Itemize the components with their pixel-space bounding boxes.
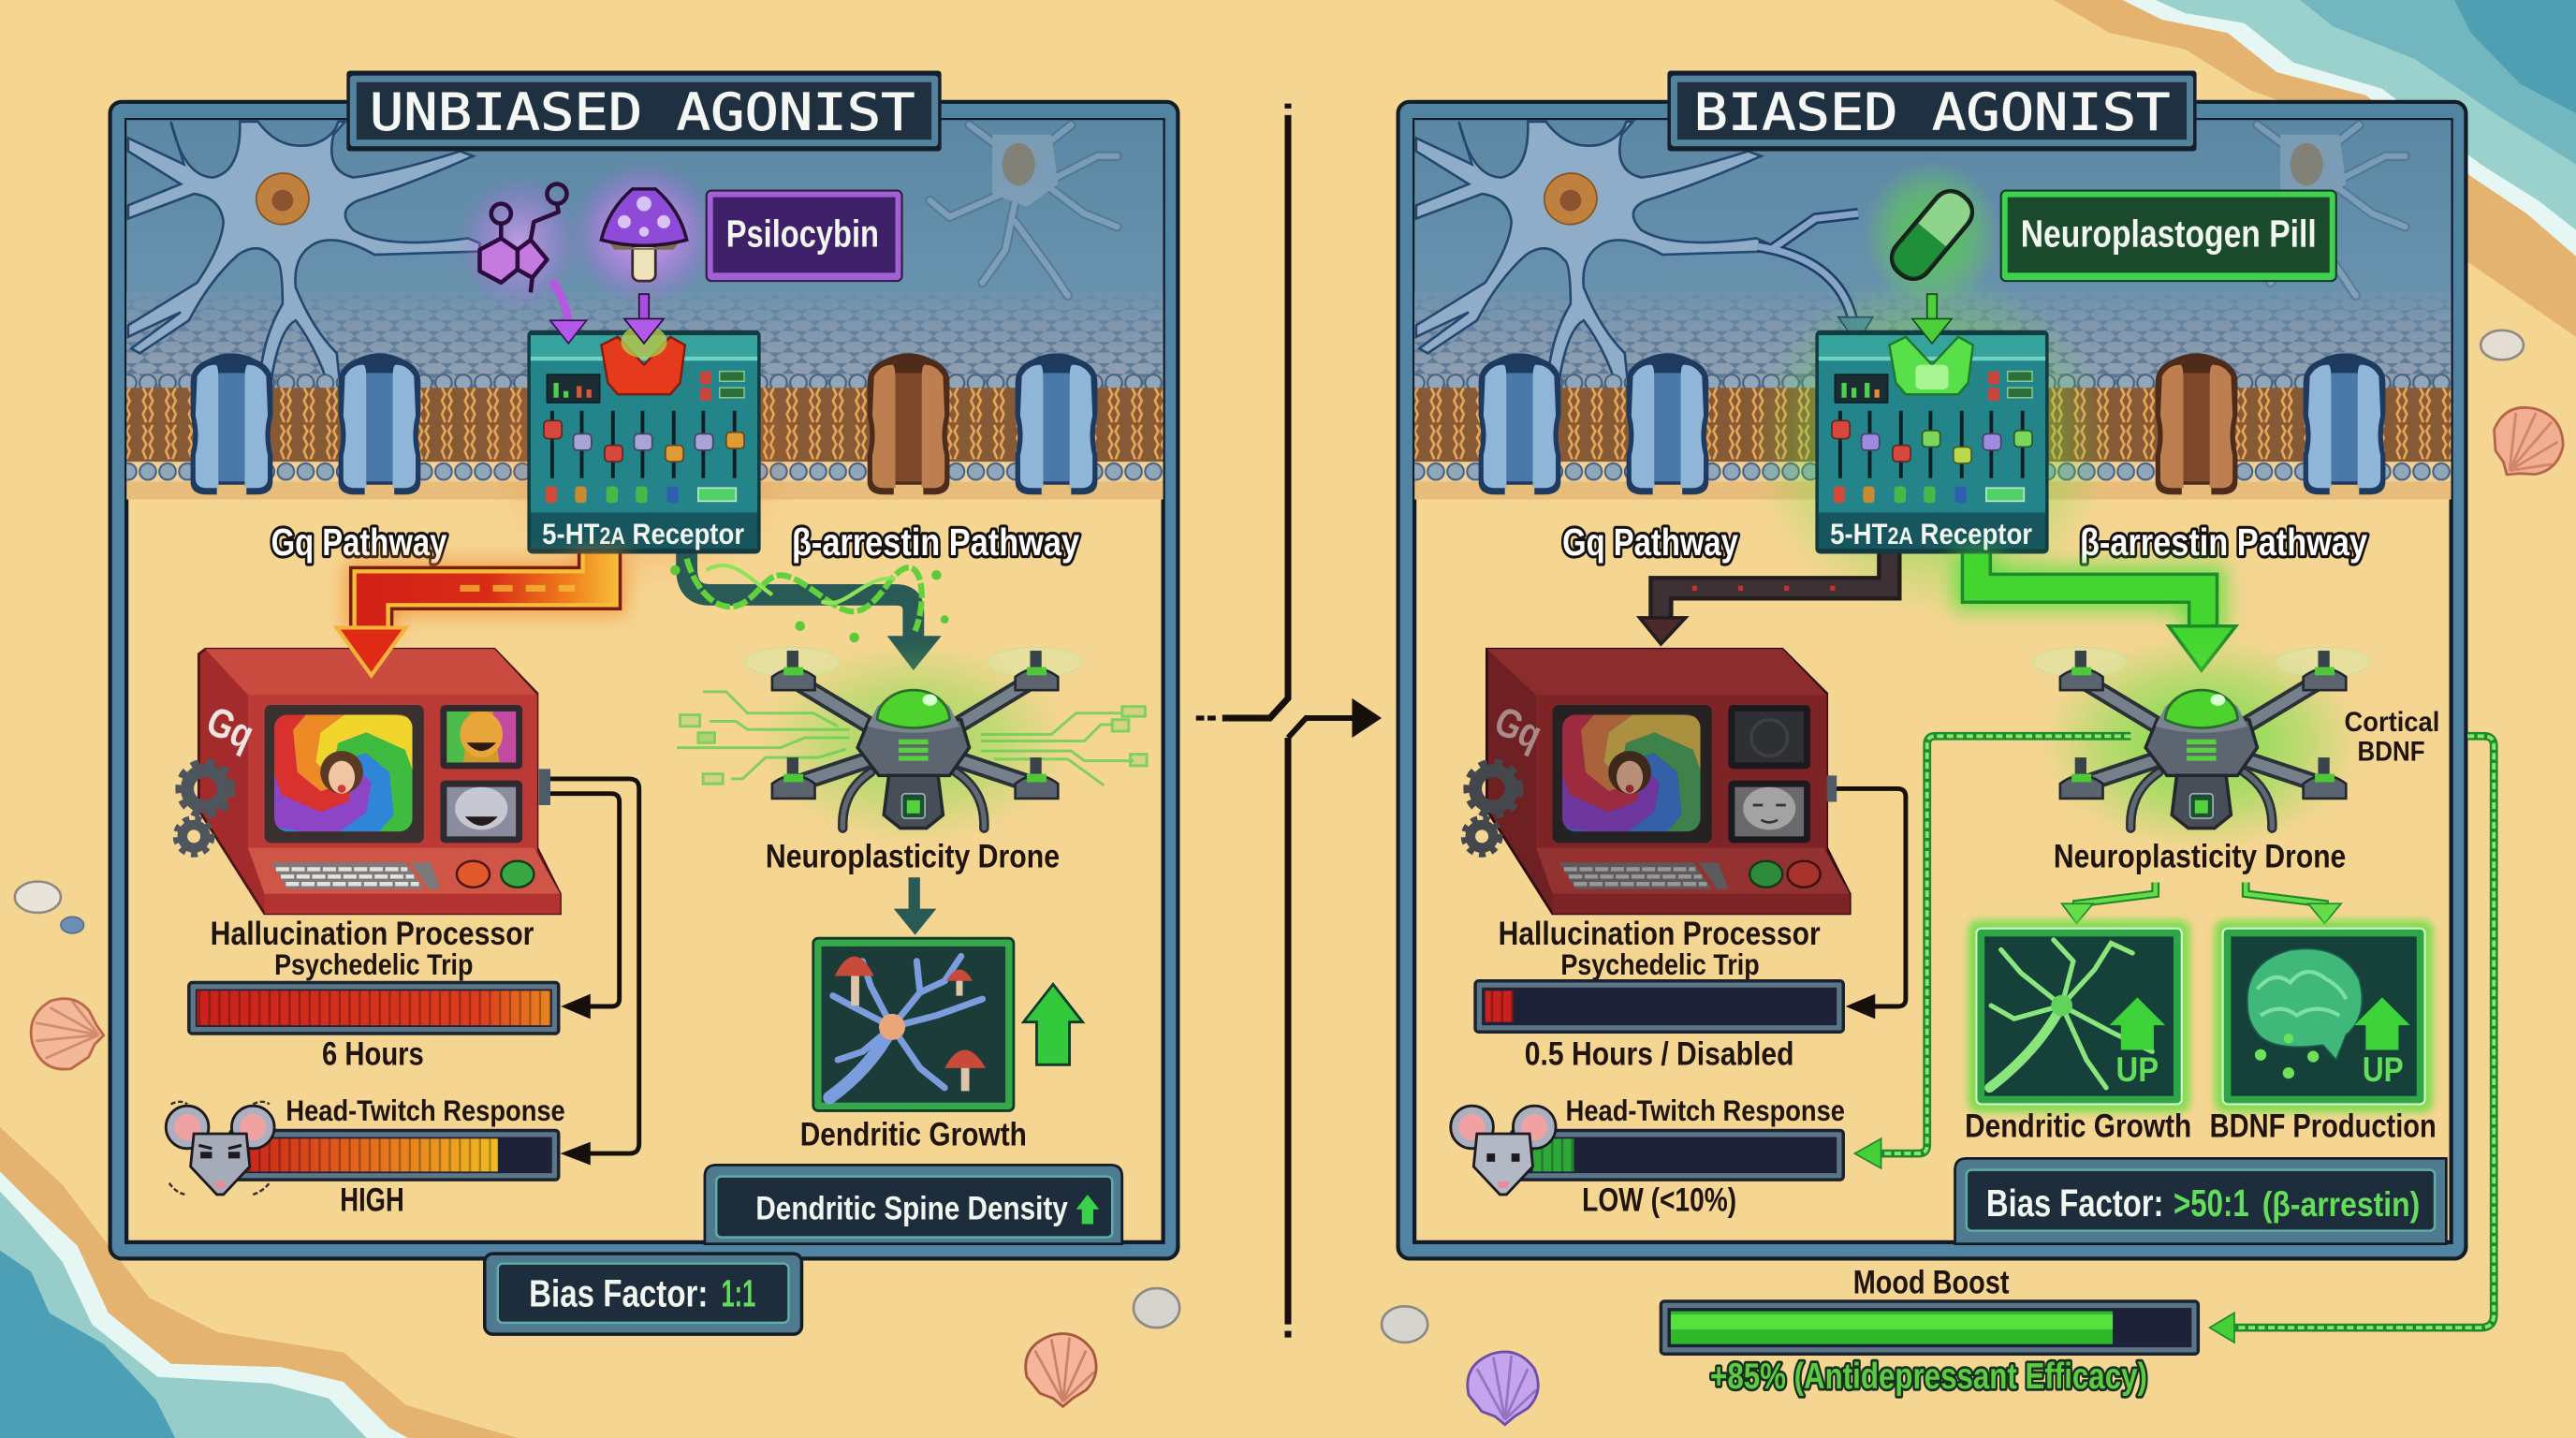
label: hallucination processor: Hallucination Processor: [1499, 916, 1821, 952]
side Gq mark: Gq: [1488, 697, 1548, 758]
label: dendritic growth: Dendritic Growth: [1965, 1108, 2191, 1145]
cell membrane scene: [126, 120, 1164, 500]
heading: unbiased agonist title: UNBIASED AGONIST: [370, 83, 915, 142]
drone glow: [757, 640, 1070, 844]
label: half hour disabled: 0.5 Hours / Disabled: [1525, 1035, 1794, 1072]
label: psychedelic trip: Psychedelic Trip: [274, 947, 473, 981]
icon: hallucination processor computer: [176, 649, 560, 914]
label: BDNF production: BDNF Production: [2210, 1108, 2437, 1145]
gears: [1464, 762, 1519, 855]
main screen dim spiral: [1552, 705, 1712, 843]
arrow: drone to BDNF: [2246, 882, 2341, 923]
label: low: LOW (<10%): [1582, 1182, 1736, 1219]
bar: mood boost: [1661, 1301, 2198, 1354]
label: head-twitch response: Head-Twitch Response: [1566, 1093, 1845, 1127]
heading: biased agonist title: BIASED AGONIST: [1694, 83, 2170, 142]
shell: purple: [1468, 1352, 1538, 1425]
shell: coral bottom: [1026, 1334, 1096, 1406]
arrow: dashed green to mood boost: [2210, 736, 2494, 1343]
callout: bias factor 1:1: Bias Factor:: [529, 1271, 708, 1314]
label: neuroplasticity drone: Neuroplasticity Drone: [2054, 839, 2346, 875]
arrow: drone to dendritic growth: [2062, 882, 2156, 923]
icon: calm mouse: [1451, 1106, 1556, 1195]
icon: BDNF production card: UP: [2363, 1050, 2404, 1089]
heading: beta-arrestin pathway: β-arrestin Pathway: [792, 521, 1080, 564]
arrow: dashed green to head-twitch bar: [1855, 736, 2130, 1168]
receptor label: 5-HT2A Receptor: [542, 517, 744, 550]
icon: BDNF production card: [2215, 920, 2433, 1112]
arrow: Gq fire path: [337, 553, 600, 675]
pebble: grey bottom: [1134, 1288, 1179, 1328]
label: dendritic growth: Dendritic Growth: [800, 1116, 1027, 1152]
label: neuroplastogen pill: Neuroplastogen Pill: [2021, 212, 2317, 255]
buttons: [457, 861, 534, 888]
label: six hours: 6 Hours: [322, 1035, 424, 1072]
icon: twitching mouse: [166, 1102, 274, 1195]
arrow: green up: [1023, 984, 1083, 1064]
arrow: pill to receptor: [1912, 294, 1952, 344]
receptor console: [1815, 330, 2049, 553]
receptor label: 5-HT2A Receptor: [1830, 517, 2032, 550]
arrow: beta-arrestin vine path: [670, 553, 949, 670]
fader knobs: [1832, 420, 2032, 463]
small screen: dark: [1728, 705, 1810, 769]
icon: hallucination processor computer (dimmed): [1464, 649, 1850, 914]
label: psychedelic trip: Psychedelic Trip: [1560, 947, 1760, 981]
arrow: molecule to receptor: [550, 281, 587, 344]
pebble: right: [2481, 330, 2524, 360]
ion channels: [191, 353, 1097, 494]
side Gq mark: Gq: [200, 697, 260, 758]
keyboard: [271, 862, 440, 889]
label: neuroplasticity drone: Neuroplasticity Drone: [766, 839, 1060, 875]
bar: trip duration: [189, 983, 559, 1034]
panel sand interior: [1414, 120, 2452, 1242]
icon: neuroplasticity drone: [744, 648, 1083, 829]
small screen: smiling face: [440, 705, 522, 769]
wire: computer to trip bar: [1827, 775, 1906, 1016]
gears: [176, 762, 231, 855]
fader knobs: [544, 420, 744, 462]
label: psilocybin: [707, 191, 902, 281]
pebble: blue: [61, 917, 84, 933]
label: psilocybin: Psilocybin: [726, 212, 879, 255]
panel sand interior: [126, 120, 1164, 1242]
label: high: HIGH: [340, 1182, 404, 1219]
callout: bias factor >50:1: Bias Factor:: [1986, 1181, 2163, 1225]
label: antidepressant efficacy: +85% (Antidepressant Efficacy): [1710, 1357, 2147, 1397]
icon: mushroom: [568, 161, 720, 305]
wires: computer to bars: [539, 769, 639, 1162]
shell: white pebble left: [15, 882, 61, 913]
heading: unbiased agonist title: [346, 70, 942, 151]
green binding socket: [1889, 337, 1973, 394]
callout: bias factor 1:1: [485, 1254, 801, 1334]
label: hallucination processor: Hallucination Processor: [211, 916, 534, 952]
brain: [2247, 948, 2362, 1060]
display bars: [553, 383, 592, 398]
callout: bias factor >50:1: [1955, 1158, 2446, 1244]
mushrooms on spines: [835, 956, 986, 1091]
red binding socket: [601, 326, 685, 394]
panel frame: [1398, 102, 2466, 1258]
main screen spiral: [264, 705, 424, 843]
cell membrane scene: [1414, 120, 2452, 500]
bar: head-twitch response: [1512, 1131, 1843, 1180]
heading: biased agonist title: [1667, 70, 2197, 151]
drone glow: [2041, 634, 2363, 851]
panel frame: [110, 102, 1178, 1258]
shell: coral right: [2476, 393, 2576, 493]
small screen: grey sleeping face: [1728, 781, 1810, 843]
buttons: [1749, 861, 1821, 888]
bar: head-twitch response: [230, 1131, 559, 1180]
ion channels: [1479, 353, 2385, 494]
heading: Gq pathway: Gq Pathway: [271, 521, 447, 564]
arrow: strong beta-arrestin path: [1976, 553, 2236, 670]
label: cortical BDNF: [2345, 707, 2439, 768]
callout: dendritic spine density: Dendritic Spine Density: [755, 1190, 1068, 1226]
heading: beta-arrestin pathway: β-arrestin Pathway: [2080, 521, 2368, 564]
orange receptor glow: [488, 329, 800, 592]
icon: neuroplasticity drone: [2032, 648, 2371, 829]
shell: coral left: [28, 996, 107, 1073]
small screen: glitch face: [440, 781, 522, 843]
ocean: top-right corner: [2054, 0, 2576, 337]
label: head-twitch response: Head-Twitch Response: [285, 1093, 565, 1127]
panel: unbiased agonist: [110, 102, 1178, 1258]
receptor console: [527, 326, 761, 553]
icon: dendritic growth card: [813, 938, 1014, 1110]
ocean: bottom-left corner: [0, 1127, 522, 1438]
callout: bias factor >50:1: (β-arrestin): [2262, 1185, 2420, 1224]
label: neuroplastogen pill: [2001, 191, 2336, 281]
bar: trip duration: [1475, 981, 1843, 1032]
label: cortical BDNF: BDNF: [2358, 737, 2425, 768]
label: mood boost: Mood Boost: [1853, 1264, 2010, 1300]
arrow: drone to dendritic growth: [894, 877, 936, 935]
circuit data lines: [677, 692, 1147, 785]
pebble: grey centre: [1382, 1306, 1427, 1343]
heading: Gq pathway: Gq Pathway: [1562, 521, 1738, 564]
callout: bias factor 1:1: 1:1: [721, 1271, 755, 1314]
display bars: [1841, 383, 1880, 398]
neuron branch arrow to receptor: [1758, 213, 1873, 344]
panel: biased agonist: [1398, 102, 2466, 1258]
label: cortical BDNF: Cortical: [2345, 707, 2439, 738]
callout: bias factor >50:1: >50:1: [2174, 1181, 2249, 1225]
centre divider with arrow: [1196, 104, 1382, 1338]
keyboard: [1559, 862, 1728, 889]
icon: dendritic growth card: UP: [2116, 1050, 2159, 1089]
molecule: psilocybin structure: [457, 174, 581, 312]
icon: dendritic growth card: [1969, 920, 2190, 1112]
arrow: mushroom to receptor: [624, 294, 664, 344]
callout: dendritic spine density: [705, 1165, 1122, 1244]
arrow: weakened Gq path: [1640, 553, 1889, 644]
icon: neuroplastogen pill: [1863, 161, 2001, 309]
neuron branches: [829, 956, 983, 1097]
green receptor glow: [1751, 271, 2113, 616]
